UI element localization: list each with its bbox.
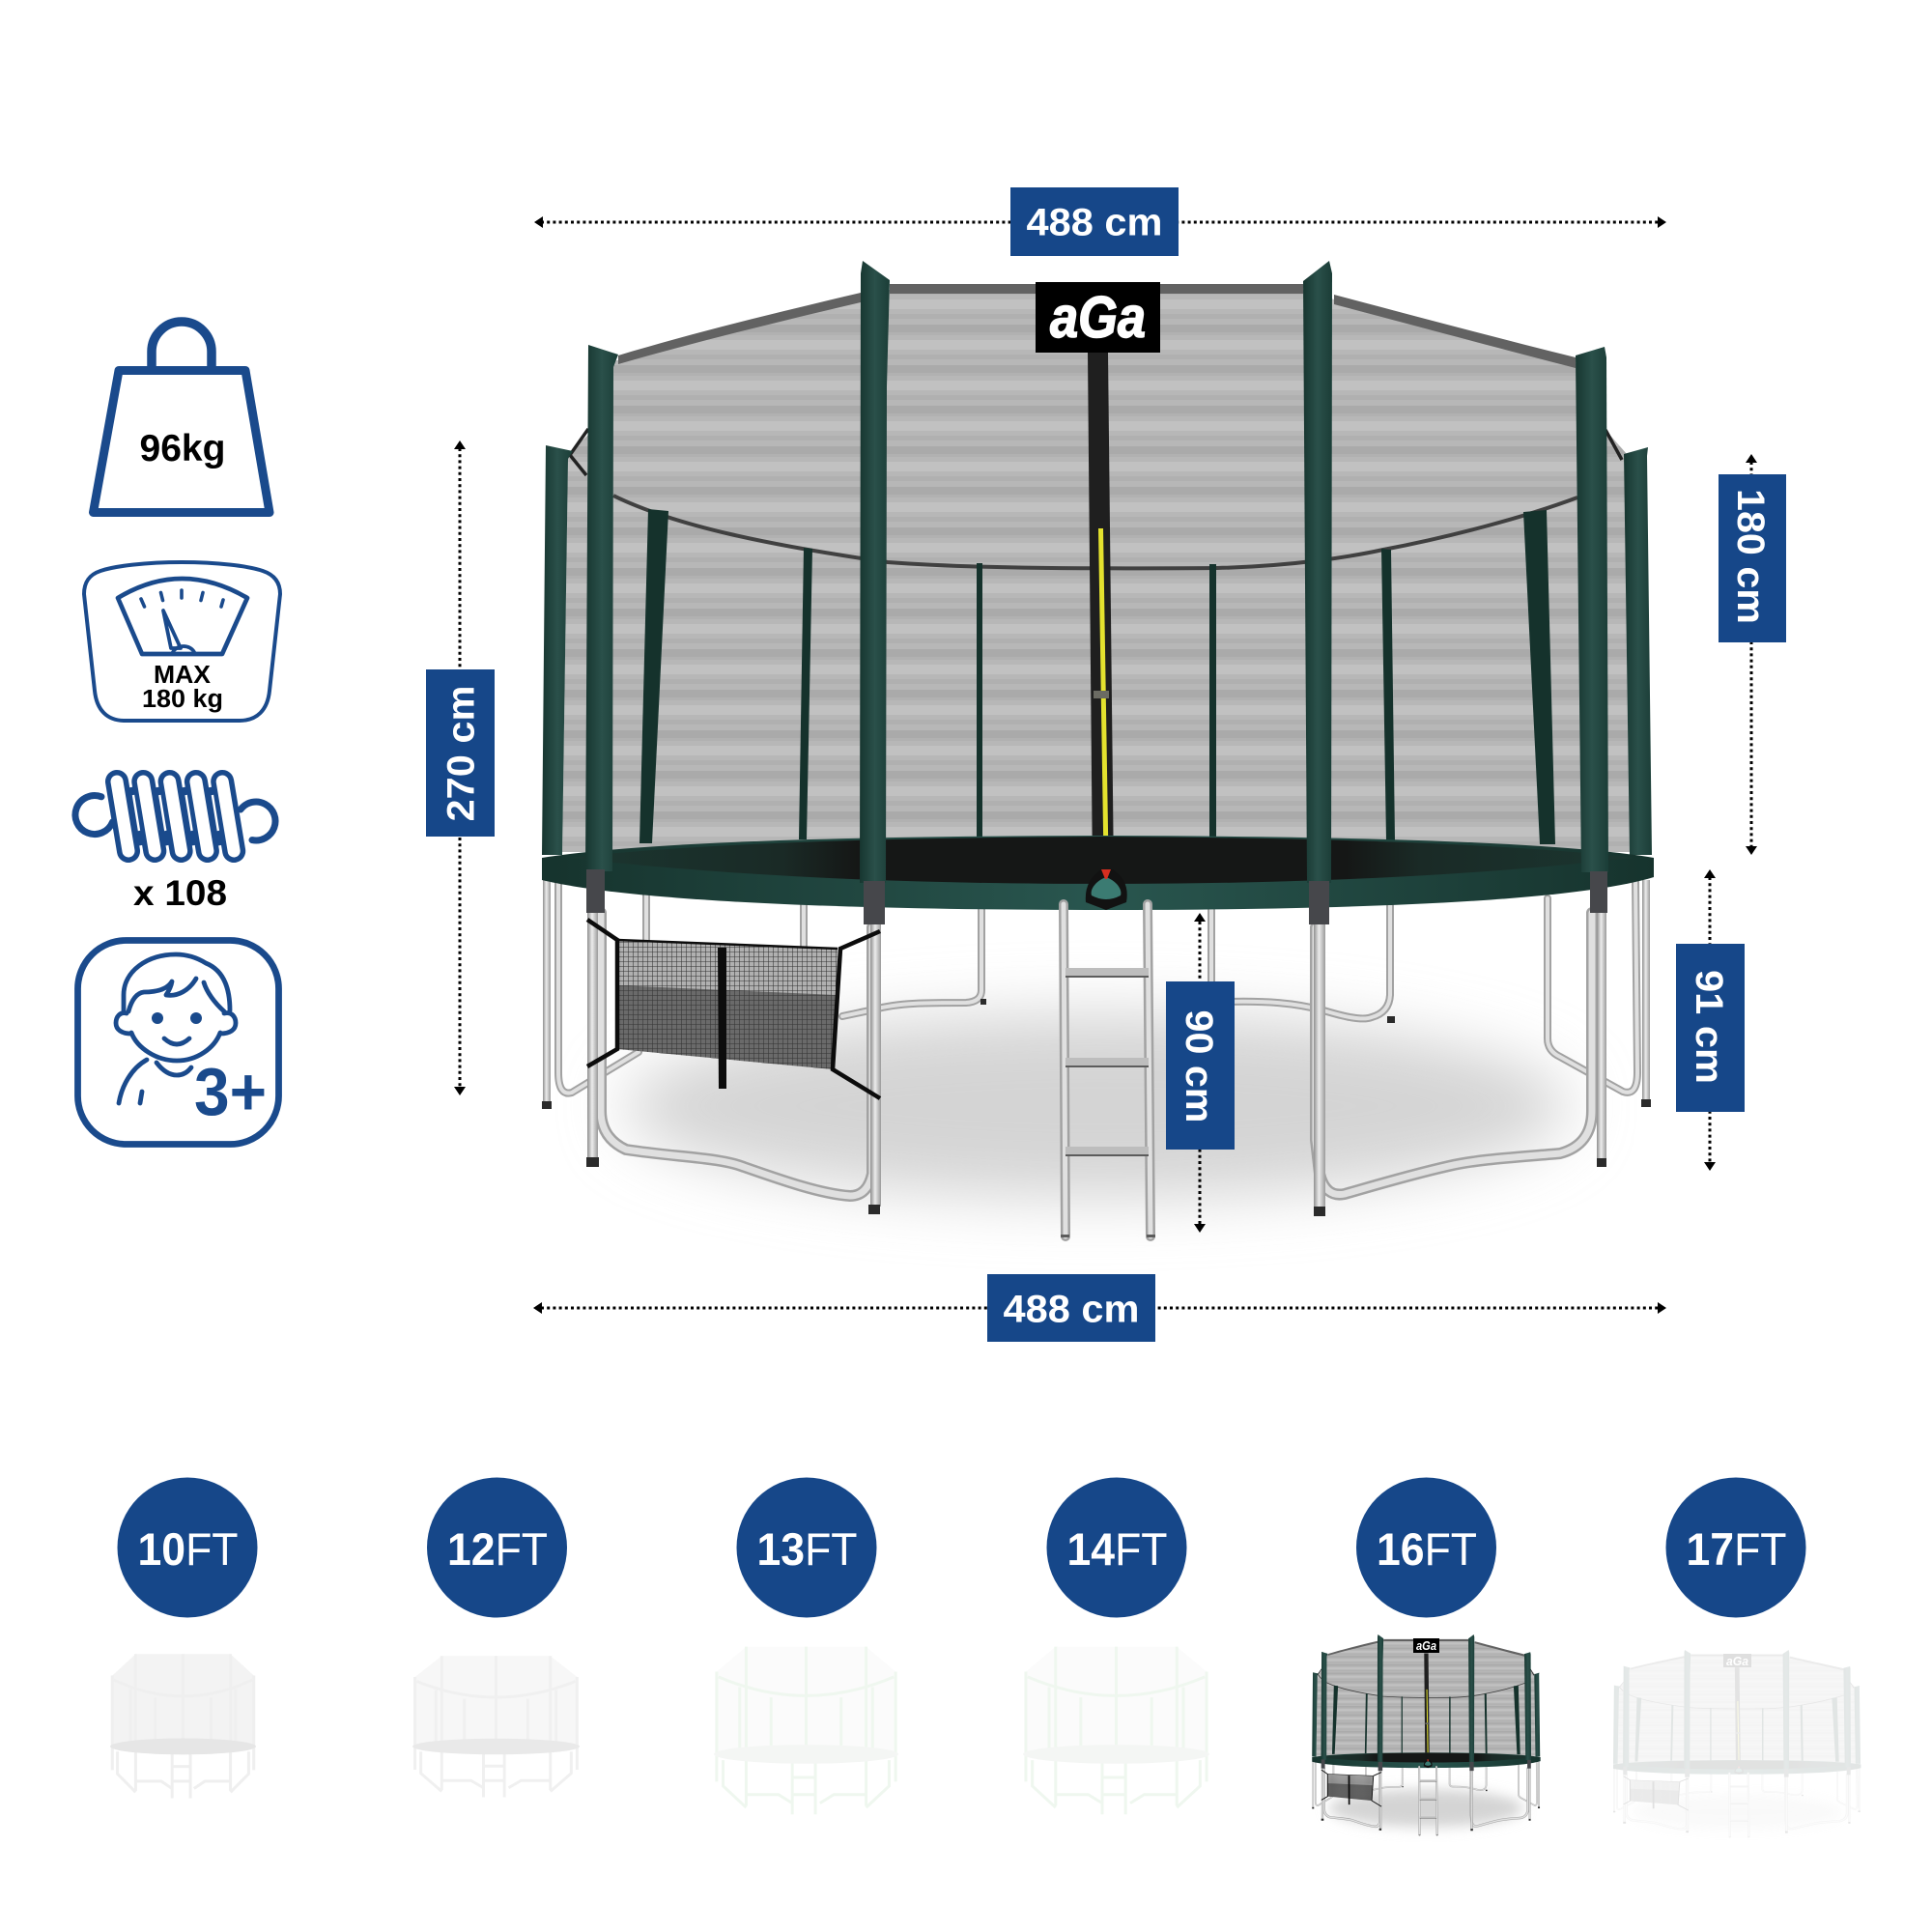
storage bag bbox=[587, 920, 880, 1098]
dimension: frame height 91 cm: 91 cm bbox=[1688, 970, 1730, 1084]
dimension: total height 270 cm bbox=[426, 440, 495, 1095]
frame pad bbox=[542, 836, 1654, 910]
badge 13FT bbox=[736, 1478, 877, 1617]
ladder bbox=[1061, 904, 1155, 1237]
faded thumbnail 14FT bbox=[1023, 1647, 1209, 1814]
back legs and frames bbox=[542, 880, 1651, 1109]
highlighted thumbnail 16FT: aGa bbox=[1416, 1638, 1436, 1653]
faded thumbnail 10FT bbox=[110, 1654, 256, 1798]
badge 13FT: 13FT bbox=[757, 1523, 858, 1575]
icon: weight 96kg bbox=[93, 322, 270, 512]
icon: max load scale bbox=[84, 562, 280, 721]
dimension: bottom width 488 cm bbox=[533, 1274, 1666, 1342]
badge 10FT bbox=[118, 1478, 257, 1617]
front net posts bbox=[585, 345, 618, 871]
icon: max load scale: MAX bbox=[154, 662, 211, 689]
badge 10FT: 10FT bbox=[137, 1523, 238, 1575]
badge 14FT bbox=[1047, 1478, 1186, 1617]
dimension: top width 488 cm bbox=[534, 187, 1666, 256]
logo on net: aGa bbox=[1050, 285, 1146, 350]
dimension: bottom width 488 cm: 488 cm bbox=[1003, 1289, 1140, 1331]
icon: child age 3+: 3+ bbox=[194, 1054, 267, 1129]
outer posts rear bbox=[542, 445, 573, 855]
icon: springs x 108: x 108 bbox=[133, 873, 227, 913]
safety net bbox=[562, 290, 1633, 852]
black jumping mat bbox=[570, 837, 1633, 884]
highlighted thumbnail 16FT bbox=[1312, 1634, 1541, 1835]
badge 12FT bbox=[427, 1478, 567, 1617]
main trampoline product bbox=[542, 261, 1654, 1237]
floor shadow bbox=[623, 1014, 1570, 1198]
dimension: frame height 91 cm bbox=[1676, 869, 1745, 1171]
inner net posts bbox=[639, 509, 1555, 844]
dimension: top width 488 cm: 488 cm bbox=[1026, 201, 1163, 243]
faded thumbnail 17FT bbox=[1613, 1650, 1861, 1837]
corner straps bbox=[570, 429, 1622, 475]
dimension: net height 180 cm: 180 cm bbox=[1729, 489, 1772, 624]
size badges row bbox=[118, 1478, 1806, 1617]
net top hem bbox=[618, 284, 1576, 368]
dimension: net height 180 cm bbox=[1719, 454, 1786, 855]
entrance toggle bbox=[1086, 869, 1127, 910]
badge 14FT: 14FT bbox=[1066, 1523, 1167, 1575]
dimension: ladder height 90 cm: 90 cm bbox=[1178, 1010, 1220, 1122]
icon: springs x 108 bbox=[75, 781, 275, 913]
yellow zipper bbox=[1101, 528, 1106, 860]
faded thumbnail 17FT: aGa bbox=[1726, 1654, 1748, 1668]
foam leg sleeves bbox=[586, 869, 1607, 924]
badge 17FT bbox=[1665, 1478, 1806, 1617]
black entrance strap bbox=[1088, 353, 1114, 879]
dimension: ladder height 90 cm bbox=[1166, 913, 1235, 1233]
faded thumbnail 12FT bbox=[412, 1656, 580, 1797]
buckle bbox=[1094, 691, 1109, 698]
faded thumbnail 13FT bbox=[714, 1647, 898, 1814]
dimension: total height 270 cm: 270 cm bbox=[440, 686, 483, 821]
badge 16FT: 16FT bbox=[1377, 1523, 1477, 1575]
badge 12FT: 12FT bbox=[447, 1523, 548, 1575]
icon: max load scale: 180 kg bbox=[142, 686, 223, 713]
icon: child age 3+ bbox=[77, 941, 278, 1144]
icon: weight 96kg: 96kg bbox=[139, 428, 226, 469]
net lower rim bbox=[613, 496, 1577, 568]
badge 17FT: 17FT bbox=[1687, 1523, 1787, 1575]
badge 16FT bbox=[1356, 1478, 1496, 1617]
front legs and frames bbox=[586, 913, 1606, 1216]
